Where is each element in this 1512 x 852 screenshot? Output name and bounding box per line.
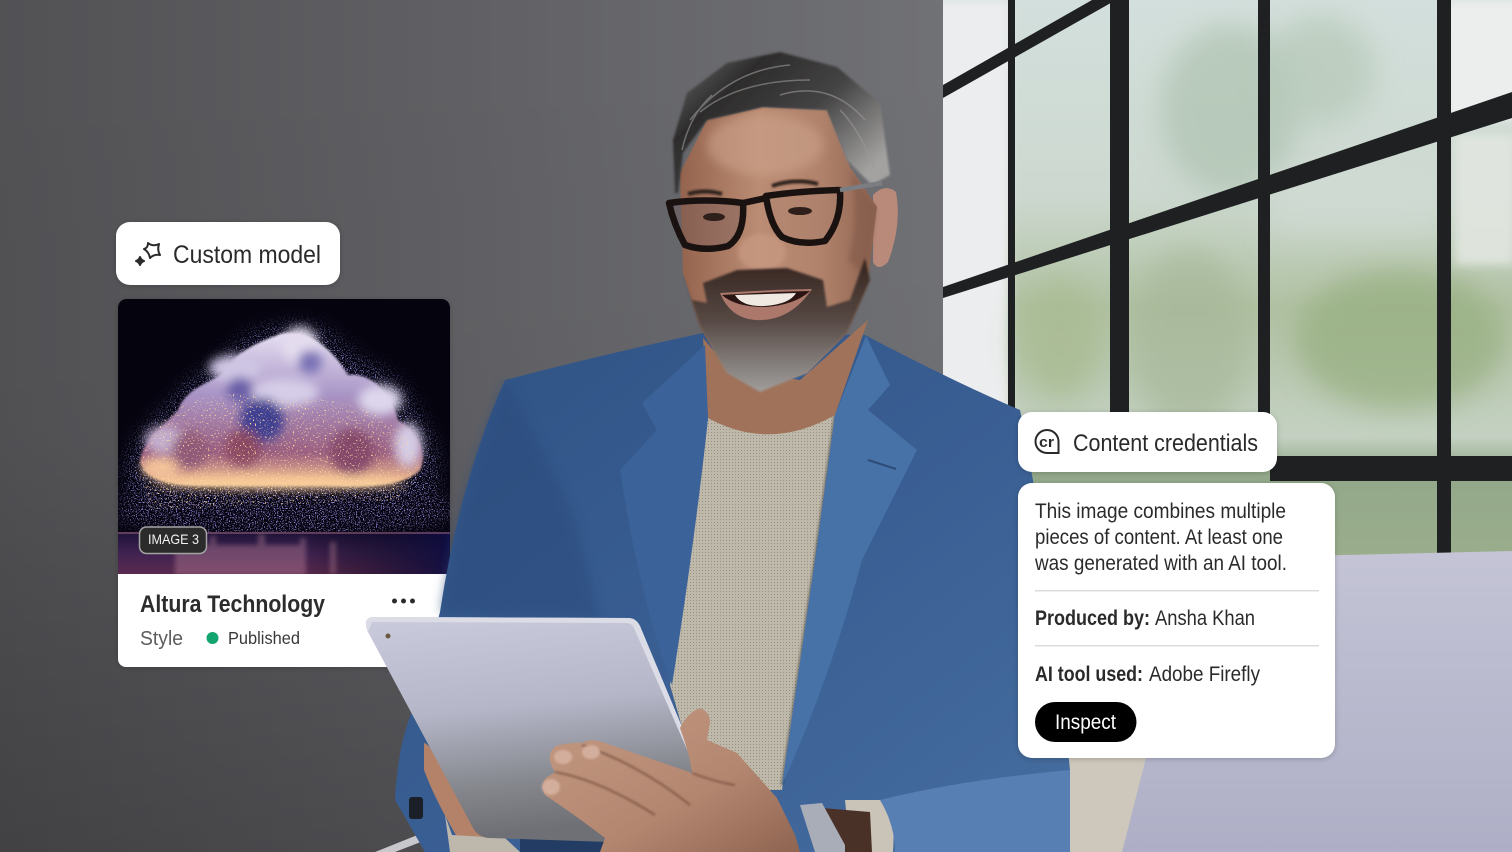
description (1034, 500, 1287, 575)
laptop screen back (1122, 551, 1512, 852)
chair rail (375, 834, 426, 852)
card title: Altura Technology (140, 591, 326, 618)
cheek shadow (848, 170, 876, 280)
icon: content credentials cr (1036, 430, 1058, 453)
badge: image 3: IMAGE 3 (148, 531, 199, 547)
description: pieces of content. At least one (1035, 526, 1283, 549)
jacket (395, 333, 1070, 852)
mouth (720, 289, 812, 320)
badge: image 3 (140, 527, 206, 554)
panel: image card (112, 299, 456, 667)
label text: Custom model (173, 241, 321, 269)
description: This image combines multiple (1035, 500, 1286, 523)
button: inspect: Inspect (1055, 711, 1116, 734)
glasses (669, 190, 840, 249)
forehead light (707, 115, 823, 175)
right cuff (845, 800, 894, 852)
beard (683, 258, 870, 392)
panel: content credentials details (1018, 483, 1335, 758)
panel: content credentials label (1018, 412, 1277, 472)
style tag: Style (140, 628, 183, 650)
teeth (722, 291, 810, 307)
sweater (670, 415, 835, 790)
person: businessman holding tablet (366, 52, 1070, 852)
produced by (1035, 607, 1255, 630)
produced by: Ansha Khan (1155, 607, 1255, 630)
tablet (366, 617, 700, 842)
AI tool used: AI tool used: (1035, 663, 1143, 686)
panel: custom model label (116, 222, 340, 285)
bottom shirt (520, 836, 640, 852)
AI tool used (1035, 663, 1260, 686)
jacket shadow on sleeve (440, 380, 600, 620)
face (680, 107, 877, 390)
window with blurred garden (925, 0, 1512, 560)
lapel pocket (868, 460, 896, 469)
watch strap (800, 803, 845, 852)
eyes (703, 207, 812, 221)
nose (738, 234, 786, 270)
AI tool used: Adobe Firefly (1149, 663, 1260, 686)
left cuff (445, 815, 520, 852)
icon: content credentials cr: cr (1039, 434, 1054, 451)
description: was generated with an AI tool. (1034, 552, 1287, 575)
lapel left (620, 345, 708, 685)
button: inspect (1035, 702, 1136, 742)
image: glowing particle cloud (112, 299, 456, 575)
glasses temple (840, 183, 882, 190)
ear (873, 188, 898, 267)
produced by: Produced by: (1035, 607, 1150, 630)
hair (673, 52, 890, 193)
icon: more options (392, 598, 415, 604)
left cuff button (409, 797, 423, 819)
right sleeve end (880, 770, 1070, 852)
wrist (822, 808, 872, 852)
eyebrows (688, 181, 818, 194)
neck (703, 320, 868, 434)
lapel right (782, 336, 917, 785)
window frame (943, 0, 1512, 560)
icon: sparkle stars (136, 243, 160, 265)
status: published: Published (228, 628, 300, 648)
hair streaks (682, 65, 875, 170)
label text: Content credentials (1073, 430, 1258, 457)
fingernails (542, 745, 600, 795)
right hand (543, 708, 800, 852)
finger creases (555, 745, 735, 815)
left hand (424, 743, 503, 842)
floor (1060, 745, 1160, 852)
sweater side shadow (782, 415, 835, 785)
